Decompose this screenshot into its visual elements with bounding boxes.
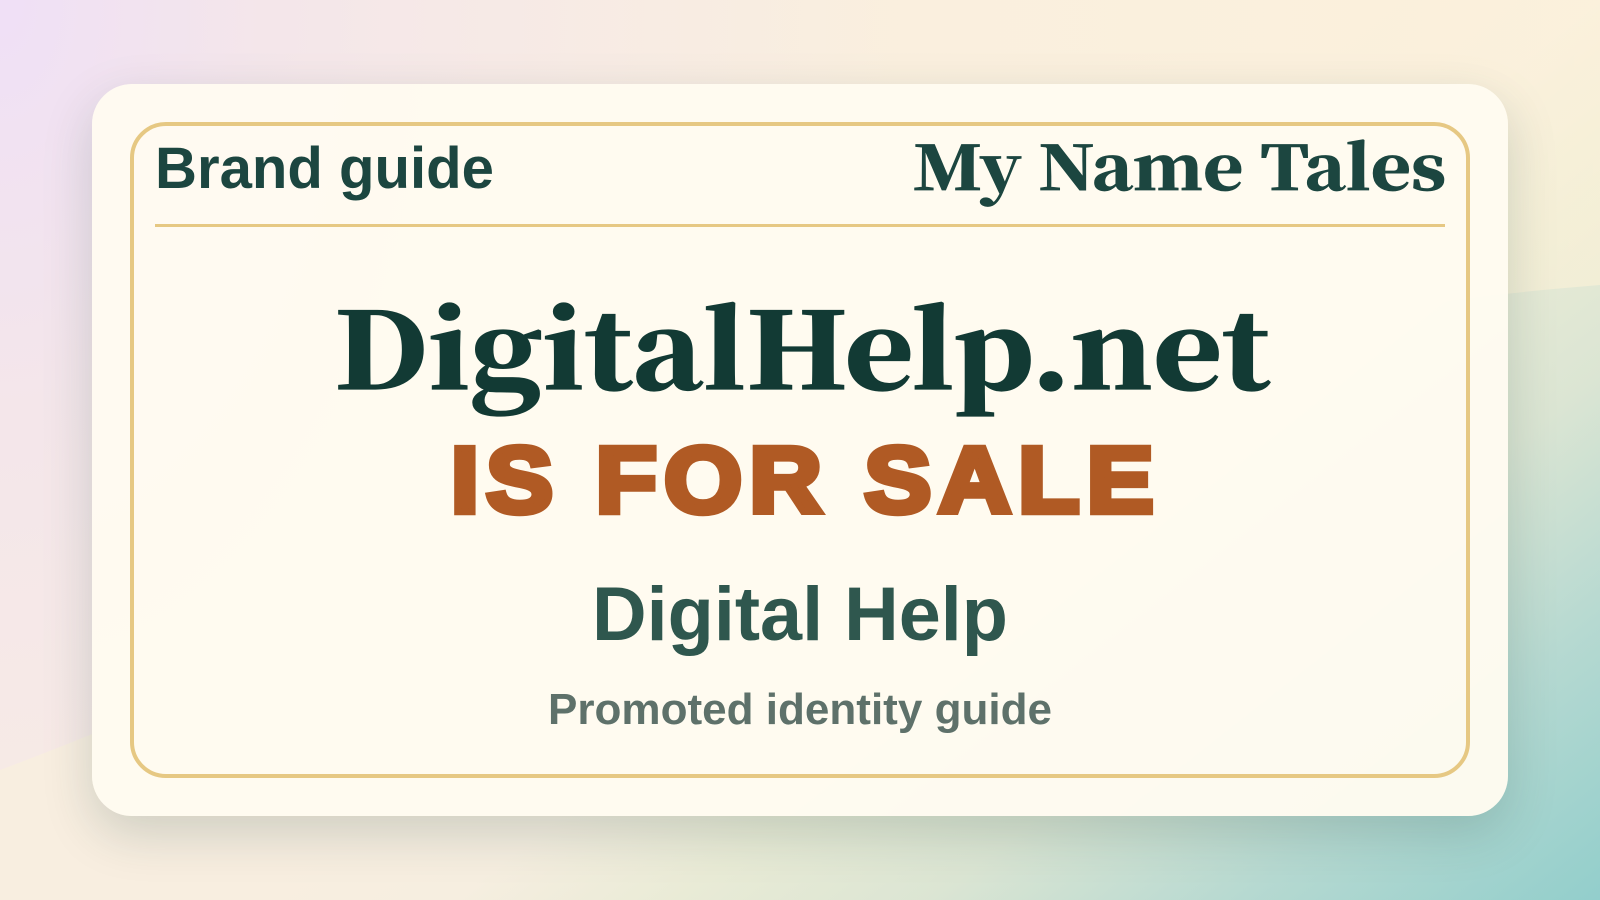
caption: Promoted identity guide: Promoted identity guide [548, 685, 1052, 734]
inner gold frame [130, 122, 1470, 778]
title: DigitalHelp.net: DigitalHelp.net [334, 269, 1270, 420]
heading: Brand guide: Brand guide [155, 136, 494, 201]
heading: My Name Tales: My Name Tales [913, 121, 1446, 208]
panel: sale card [92, 84, 1508, 816]
subtitle: IS FOR SALE: IS FOR SALE [451, 428, 1161, 532]
header divider [155, 224, 1445, 227]
brand name: Digital Help: Digital Help [592, 572, 1008, 657]
